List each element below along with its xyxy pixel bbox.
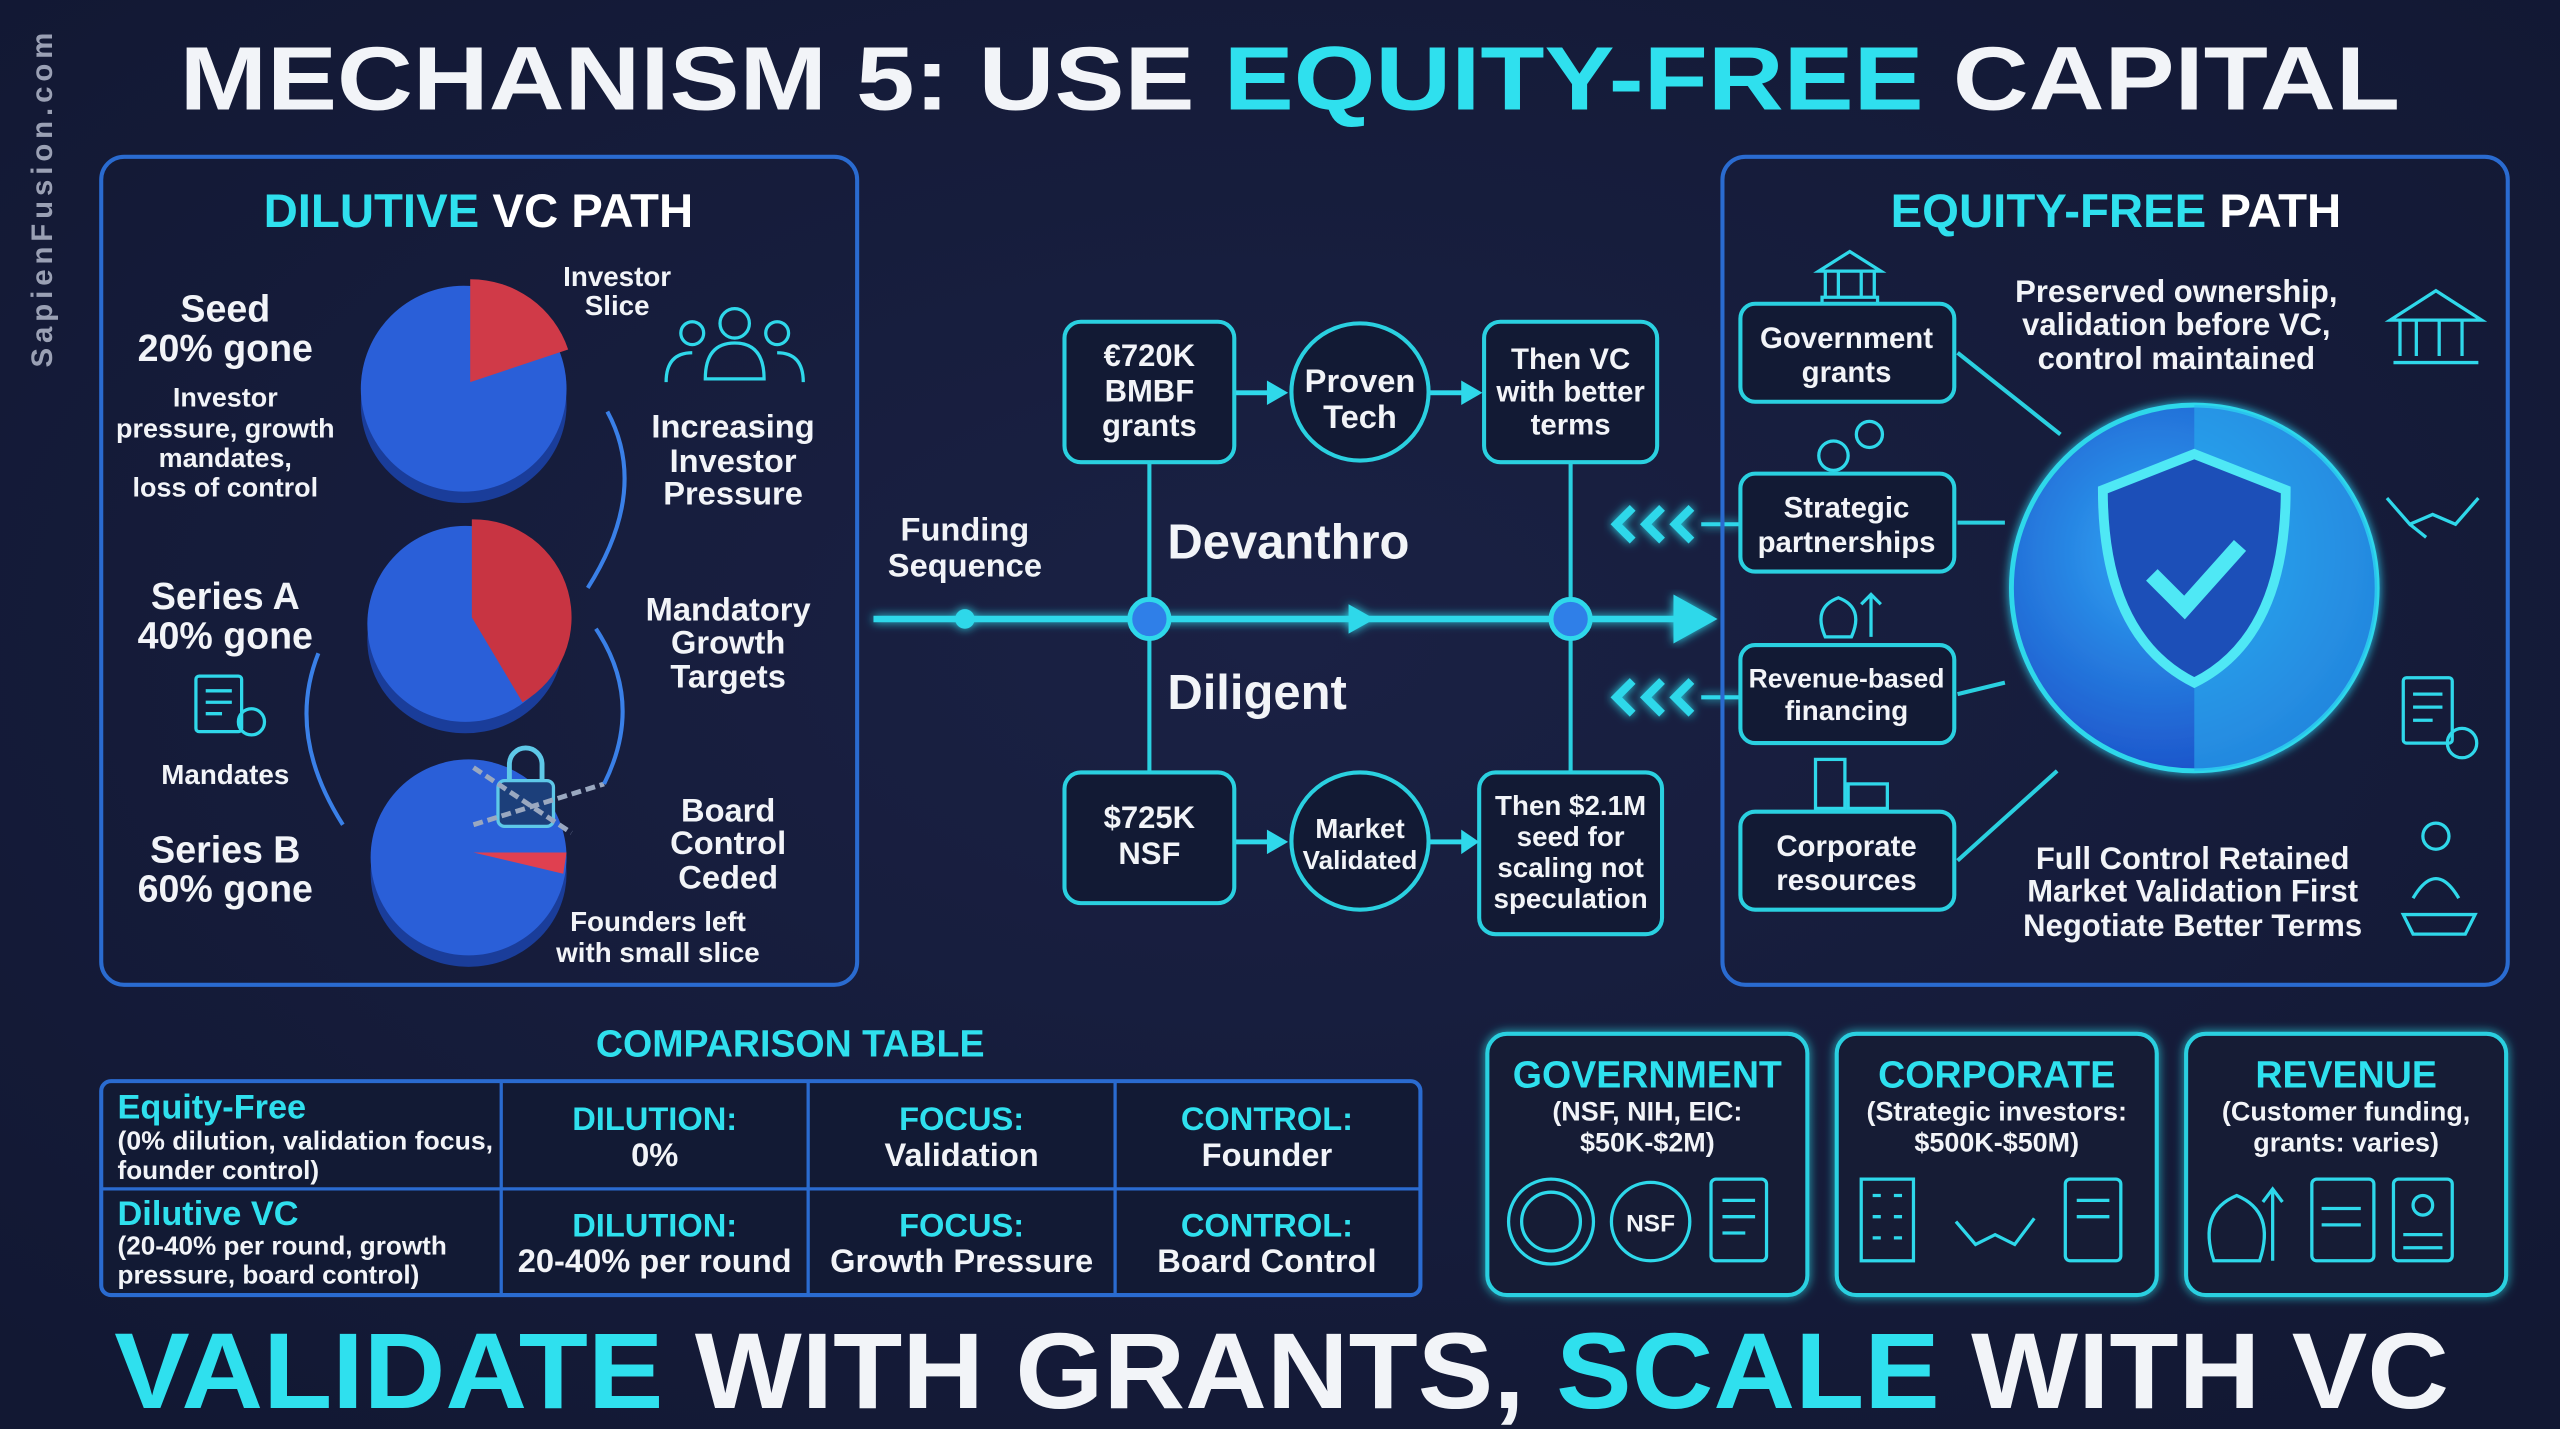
row: dilutive VC: FOCUS: xyxy=(899,1206,1024,1243)
box: BMBF: €720K xyxy=(1104,338,1196,373)
row: equity-free: Equity-Free xyxy=(118,1089,306,1127)
panel: equity-free path: Market Validation First xyxy=(2027,873,2358,908)
card: government: $50K-$2M) xyxy=(1580,1127,1715,1157)
row: dilutive VC: Dilutive VC xyxy=(118,1195,298,1233)
card: revenue: (Customer funding, xyxy=(2222,1096,2470,1126)
circle: proven tech xyxy=(1291,323,1429,461)
panel: dilutive VC path: Ceded xyxy=(678,858,778,895)
comparison table: COMPARISON TABLE xyxy=(596,1023,985,1065)
row: equity-free: (0% dilution, validation focus, xyxy=(118,1126,493,1156)
funding sequence timeline xyxy=(873,322,1740,934)
panel: dilutive VC path: Mandatory xyxy=(646,591,811,628)
box: then VC xyxy=(1484,322,1657,462)
panel: dilutive VC path: 60% gone xyxy=(138,867,313,909)
card: corporate: CORPORATE xyxy=(1878,1054,2115,1096)
panel: dilutive VC path: Pressure xyxy=(663,475,803,512)
footer tagline: VALIDATE WITH GRANTS, SCALE WITH VC xyxy=(114,1310,2449,1429)
panel: dilutive VC path: Investor xyxy=(670,442,797,479)
funding sequence timeline: Sequence xyxy=(888,546,1042,584)
Diligent label: Diligent xyxy=(1167,666,1347,720)
circle: market validated: Market xyxy=(1315,813,1405,844)
card: revenue: grants: varies) xyxy=(2253,1127,2439,1157)
panel: equity-free path: resources xyxy=(1776,864,1917,897)
chevrons xyxy=(1616,508,1740,714)
row: equity-free: Founder xyxy=(1202,1136,1332,1173)
panel: dilutive VC path: Targets xyxy=(670,658,786,695)
row: equity-free: CONTROL: xyxy=(1181,1100,1353,1137)
source boxes xyxy=(1740,252,1954,402)
row: dilutive VC: Board Control xyxy=(1157,1242,1377,1279)
icon: investors xyxy=(666,309,803,382)
panel: dilutive VC path: Growth xyxy=(671,623,785,660)
icon: mandates doc xyxy=(196,676,264,735)
comparison table xyxy=(101,1023,1420,1295)
row: equity-free: DILUTION: xyxy=(572,1100,737,1137)
box: then VC: Then VC xyxy=(1511,343,1630,376)
connectors xyxy=(1958,353,2060,861)
box: NSF: NSF xyxy=(1118,836,1180,871)
panel: dilutive VC path: pressure, growth xyxy=(116,414,335,444)
card: revenue: REVENUE xyxy=(2255,1054,2437,1096)
panel: dilutive VC path: Founders left xyxy=(570,906,746,937)
row: dilutive VC: Growth Pressure xyxy=(830,1242,1093,1279)
row: dilutive VC: DILUTION: xyxy=(572,1206,737,1243)
circle: market validated: Validated xyxy=(1303,845,1417,875)
circle: proven tech: Proven xyxy=(1305,362,1415,399)
panel: dilutive VC path xyxy=(101,157,857,985)
panel: equity-free path: financing xyxy=(1785,695,1908,726)
panel: dilutive VC path: Board xyxy=(681,791,775,828)
box: seed: speculation xyxy=(1494,883,1648,914)
right labels: Investor xyxy=(563,261,671,292)
row: dilutive VC: 20-40% per round xyxy=(518,1242,792,1279)
card: revenue xyxy=(2186,1034,2506,1295)
box: seed: Then $2.1M xyxy=(1495,790,1646,821)
pie: seed xyxy=(361,279,568,503)
Devanthro label: Devanthro xyxy=(1167,516,1409,570)
panel: equity-free path: partnerships xyxy=(1758,526,1935,559)
box: then VC: with better xyxy=(1495,376,1645,409)
box: BMBF xyxy=(1064,322,1234,462)
row: equity-free: Validation xyxy=(885,1136,1039,1173)
row: equity-free: 0% xyxy=(631,1136,678,1173)
box: NSF: $725K xyxy=(1104,800,1196,835)
box: seed: seed for xyxy=(1517,821,1625,852)
row: equity-free: founder control) xyxy=(118,1155,319,1185)
box: then VC: terms xyxy=(1531,408,1611,441)
curved arrows xyxy=(306,412,625,825)
panel: dilutive VC path: Control xyxy=(670,824,786,861)
heading: EQUITY-FREE PATH xyxy=(1891,185,2341,238)
seed text: Seed xyxy=(180,288,270,330)
shield emblem xyxy=(2011,405,2377,771)
heading: dilutive: DILUTIVE VC PATH xyxy=(264,185,693,238)
card: corporate xyxy=(1837,1034,2157,1295)
panel: dilutive VC path: Increasing xyxy=(651,408,815,445)
series B: Series B xyxy=(150,828,300,870)
series A: Series A xyxy=(151,575,300,617)
card: government: (NSF, NIH, EIC: xyxy=(1552,1096,1742,1126)
arrows bottom xyxy=(1236,830,1479,854)
card: corporate: $500K-$50M) xyxy=(1914,1127,2079,1157)
card: government: NSF xyxy=(1626,1210,1675,1237)
panel: equity-free path xyxy=(1722,157,2508,985)
row: equity-free xyxy=(118,1089,1353,1185)
pie: series A xyxy=(367,519,572,733)
circle: market validated xyxy=(1291,772,1429,910)
funding sequence timeline: Funding xyxy=(901,511,1029,548)
panel: equity-free path: Strategic xyxy=(1784,492,1909,525)
main arrow xyxy=(873,594,1718,643)
panel: dilutive VC path: 20% gone xyxy=(138,327,313,369)
card: government: GOVERNMENT xyxy=(1513,1054,1782,1096)
source boxes: grants xyxy=(1802,356,1891,389)
row: dilutive VC: CONTROL: xyxy=(1181,1206,1353,1243)
panel: equity-free path: Revenue-based xyxy=(1749,664,1944,694)
card: government xyxy=(1487,1034,1807,1295)
side watermark: SapienFusion.com xyxy=(26,33,59,367)
icon: lock xyxy=(473,748,604,833)
preserved text: Preserved ownership, xyxy=(2015,274,2337,309)
panel: equity-free path: Corporate xyxy=(1776,830,1917,863)
panel: dilutive VC path: with small slice xyxy=(555,937,760,968)
panel: dilutive VC path: loss of control xyxy=(133,472,318,502)
row: dilutive VC: (20-40% per round, growth xyxy=(118,1230,447,1260)
panel: dilutive VC path: mandates, xyxy=(159,443,292,473)
box: BMBF: BMBF xyxy=(1105,374,1194,409)
circle: proven tech: Tech xyxy=(1323,398,1397,435)
box: seed xyxy=(1479,772,1662,934)
box: NSF xyxy=(1064,772,1234,903)
panel: dilutive VC path: Slice xyxy=(585,290,650,321)
box: BMBF: grants xyxy=(1102,408,1197,443)
panel: dilutive VC path: 40% gone xyxy=(138,614,313,656)
full control text: Full Control Retained xyxy=(2036,841,2349,876)
row: equity-free: FOCUS: xyxy=(899,1100,1024,1137)
title: MECHANISM 5: USE EQUITY-FREE CAPITAL xyxy=(180,29,2400,129)
row: dilutive VC: pressure, board control) xyxy=(118,1260,419,1290)
panel: equity-free path: Negotiate Better Terms xyxy=(2023,908,2362,943)
panel: equity-free path: control maintained xyxy=(2038,341,2315,376)
box: seed: scaling not xyxy=(1497,852,1644,883)
arrows top xyxy=(1236,381,1482,405)
right icons xyxy=(2387,291,2482,934)
card: corporate: (Strategic investors: xyxy=(1867,1096,2127,1126)
panel: dilutive VC path: Investor xyxy=(173,383,278,413)
source boxes: Government xyxy=(1760,322,1933,355)
panel: dilutive VC path: Mandates xyxy=(161,759,289,790)
row: dilutive VC xyxy=(118,1195,1377,1290)
pie: series B xyxy=(371,759,567,967)
panel: equity-free path: validation before VC, xyxy=(2022,307,2331,342)
